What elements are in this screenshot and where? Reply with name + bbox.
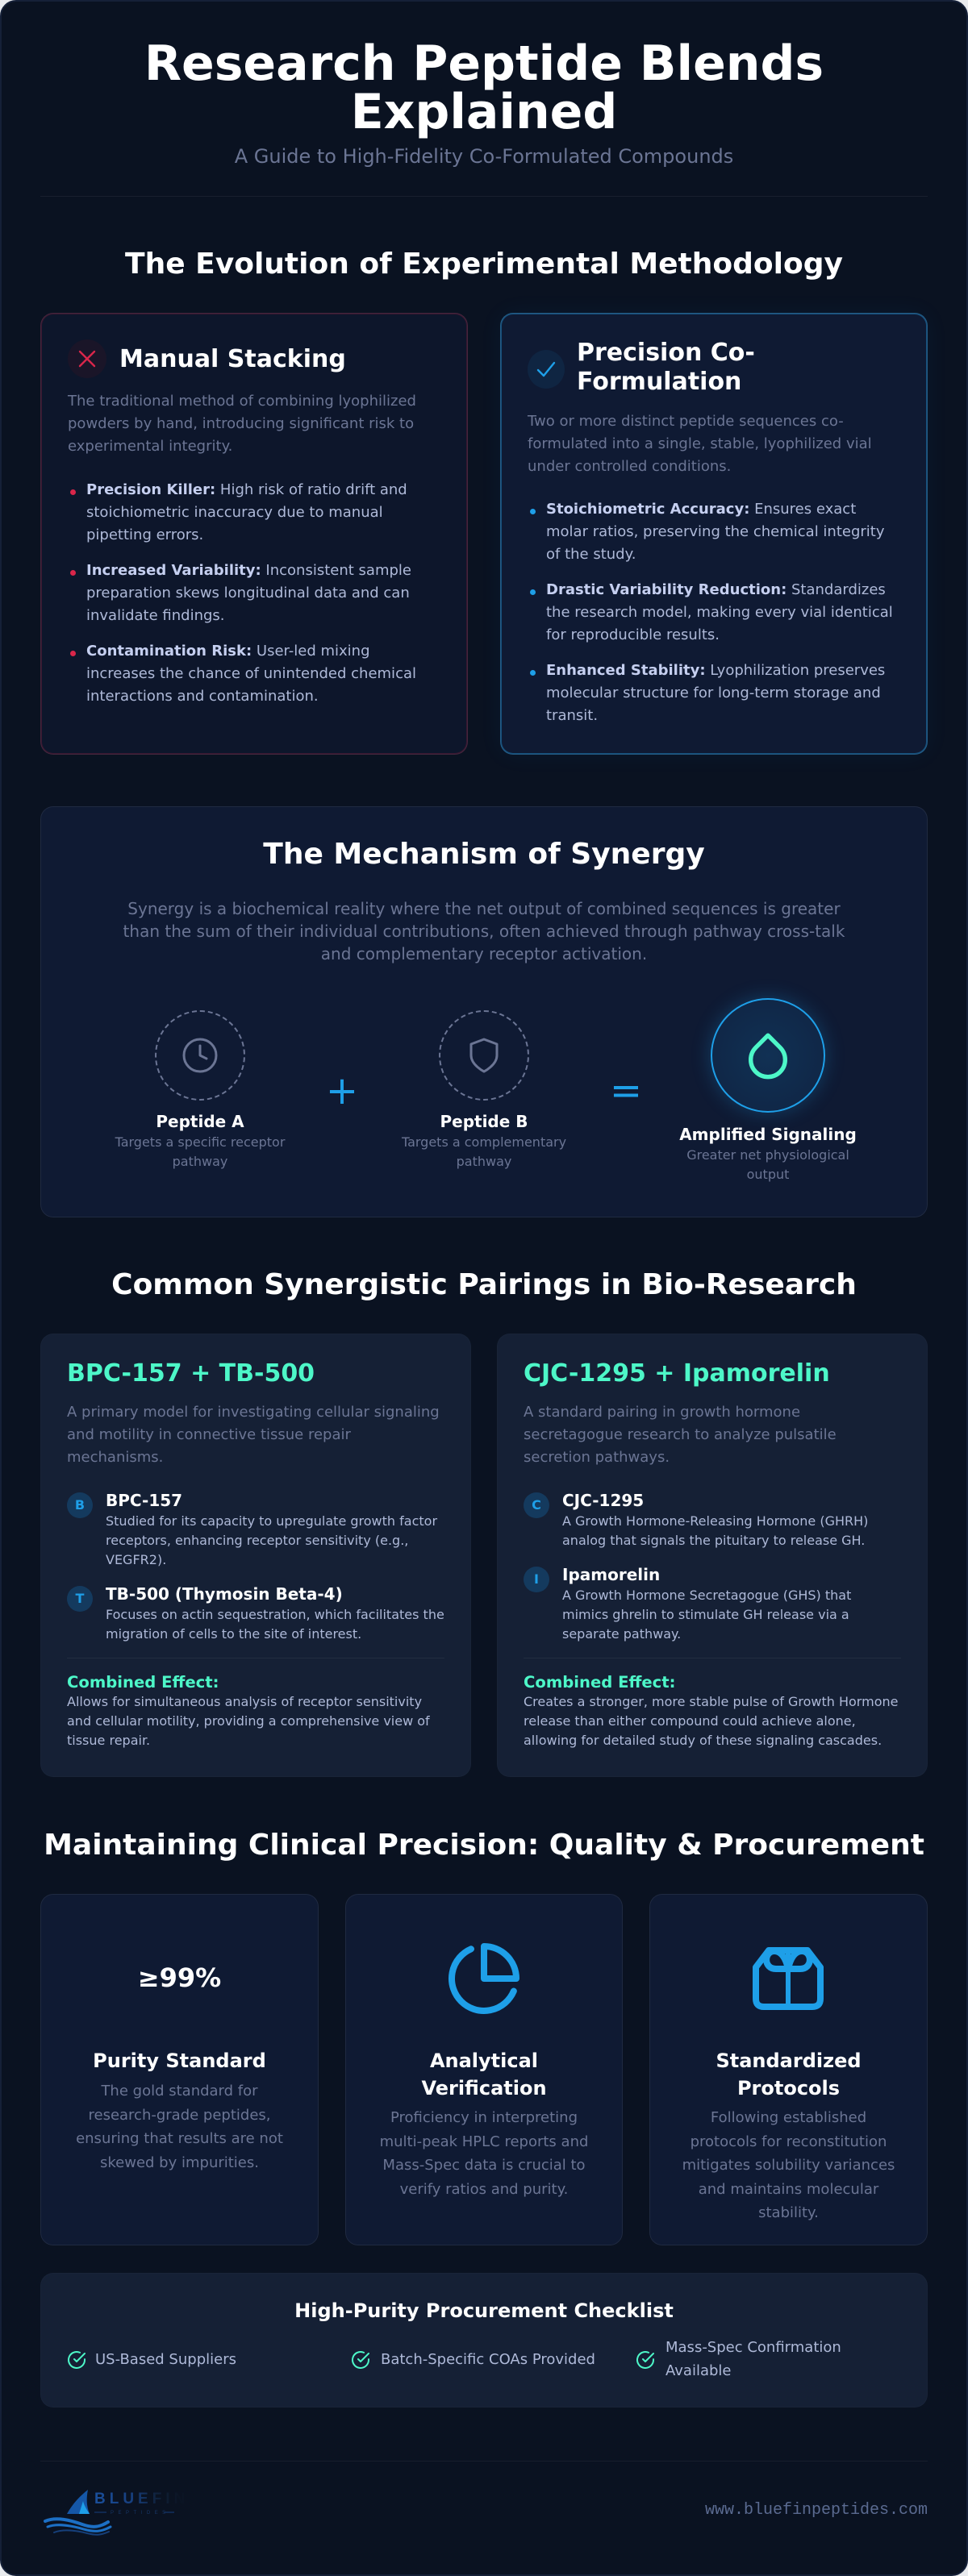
text: protocols description: mitigates solubility variances [682,2157,895,2174]
text: protocols description: stability. [758,2204,819,2221]
text: TB-500 description: Focuses on actin sequestration, which facilitates the [106,1607,444,1622]
bullet: drastic variability reduction: for reproducible results. [546,626,720,643]
heading: clinical precision: Maintaining Clinical Precision: Quality & Procurement [44,1829,924,1862]
bullet: increased variability: preparation skews longitudinal data and can [86,585,410,601]
icon: blue check [528,350,565,389]
logo: bluefin peptides: PEPTIDES [111,2511,170,2516]
text: pairing description: A primary model for investigating cellular signaling [67,1404,440,1421]
bullet: enhanced stability: Enhanced Stability: Lyophilization preserves [546,662,885,679]
badge: T [67,1586,93,1612]
text: pairing description: mechanisms. [67,1449,163,1466]
text: pairing description: and motility in connective tissue repair [67,1426,351,1443]
icon: check 3 [636,2351,654,2369]
text: combined effect description: release than either compound could achieve alone, [524,1713,856,1729]
text: co-formulation description: Two or more distinct peptide sequences co- [528,413,844,430]
bullet: drastic variability reduction: Drastic Variability Reduction: Standardizes [546,581,886,598]
text: amplified description: output [747,1167,789,1182]
text: peptide B description: Targets a complementary [402,1134,566,1150]
text: pairing description: A standard pairing in growth hormone [524,1404,800,1421]
checklist item: mass-spec confirmation: Mass-Spec Confirmation [666,2339,841,2356]
text: pairing description: secretagogue research to analyze pulsatile [524,1426,837,1443]
icon: peptide A clock [155,1010,245,1101]
text: amplified description: Greater net physiological [686,1147,849,1163]
bullet marker [70,570,76,576]
text: Ipamorelin description: separate pathway. [562,1626,681,1642]
bullet marker [530,509,536,514]
text: BPC-157 description: Studied for its capacity to upregulate growth factor [106,1513,437,1529]
heading: procurement checklist: High-Purity Procurement Checklist [294,2299,674,2322]
heading: standardized protocols: Standardized [716,2050,862,2072]
icon: amplified droplet [711,998,825,1113]
text: TB-500 description: migration of cells to the site of interest. [106,1626,361,1642]
icon: check 2 [352,2351,369,2369]
text: purity description: The gold standard for [101,2083,258,2100]
text: pairing description [524,1404,837,1466]
text: co-formulation description: under controlled conditions. [528,458,731,475]
bullet: drastic variability reduction: the research model, making every vial identical [546,604,893,621]
heading: analytical verification: Analytical [430,2050,538,2072]
bullet: drastic variability reduction [546,581,893,643]
text: CJC-1295 description [562,1513,868,1548]
heading: analytical verification [421,2050,547,2100]
text: pairing description: secretion pathways. [524,1449,670,1466]
text: verification description: Mass-Spec data is crucial to [382,2157,586,2174]
text: BPC-157 description: VEGFR2). [106,1552,166,1567]
bullet marker [70,651,76,656]
heading: CJC-1295 + Ipamorelin: CJC-1295 + Ipamorelin [524,1359,830,1388]
icon: peptide B shield [439,1010,529,1101]
panel: mechanism of synergy [40,806,928,1217]
bullet: precision killer [86,481,407,543]
symbol: equals: = [610,1068,642,1113]
title: Explained [351,84,617,140]
text: synergy description [123,899,845,963]
text: manual stacking description [68,393,416,455]
badge: T: T [76,1591,84,1606]
text: purity description: skewed by impurities. [100,2154,259,2170]
badge: I: I [534,1571,539,1587]
badge: I [524,1567,549,1592]
heading: standardized protocols: Protocols [737,2077,840,2100]
panel: precision co-formulation [500,313,928,755]
heading: manual stacking: Manual Stacking [119,345,346,373]
checklist item: US-based suppliers: US-Based Suppliers [95,2351,236,2368]
icon: check 1 [68,2351,86,2369]
name: TB-500: TB-500 (Thymosin Beta-4) [106,1584,343,1604]
panel: manual stacking [40,313,468,755]
text: TB-500 description [106,1607,444,1642]
heading: common pairings: Common Synergistic Pairings in Bio-Research [111,1268,857,1301]
text: co-formulation description: formulated into a single, stable, lyophilized vial [528,435,872,452]
panel: standardized protocols [649,1894,928,2245]
panel: procurement checklist [40,2273,928,2407]
text: peptide B description [402,1134,566,1169]
text: combined effect description [67,1694,430,1748]
text: verification description [380,2109,588,2198]
heading: precision co-formulation [577,339,755,396]
text: peptide A description: pathway [173,1154,227,1169]
title [144,35,824,140]
checklist item: mass-spec confirmation: Available [666,2362,731,2379]
bullet: stoichiometric accuracy: Stoichiometric Accuracy: Ensures exact [546,501,856,518]
badge: B: B [75,1497,85,1513]
text: combined effect description: Allows for simultaneous analysis of receptor sensitivity [67,1694,422,1709]
bullet: contamination risk: Contamination Risk: User-led mixing [86,643,370,660]
heading: precision co-formulation: Precision Co- [577,339,755,367]
text: CJC-1295 description: analog that signals the pituitary to release GH. [562,1533,865,1548]
badge: C [524,1492,549,1518]
subtitle: A Guide to High-Fidelity Co-Formulated Compounds [235,145,733,168]
heading: analytical verification: Verification [421,2077,547,2100]
bullet marker [70,489,76,495]
bullet: stoichiometric accuracy: of the study. [546,546,636,563]
bullet: contamination risk: interactions and contamination. [86,688,319,705]
heading: mechanism of synergy: The Mechanism of Synergy [263,838,705,871]
text: verification description: verify ratios and purity. [400,2180,568,2198]
label: peptide A: Peptide A [156,1112,244,1131]
label: peptide B: Peptide B [440,1112,528,1131]
text: peptide A description: Targets a specific receptor [115,1134,285,1150]
text: combined effect description: Creates a stronger, more stable pulse of Growth Hormone [524,1694,898,1709]
symbol: plus: + [326,1068,358,1113]
badge: C: C [532,1497,541,1513]
text: combined effect description: allowing for detailed study of these signaling cascades. [524,1733,882,1748]
icon: gift box [753,1947,824,2010]
text: CJC-1295 description: A Growth Hormone-Releasing Hormone (GHRH) [562,1513,868,1529]
title: Research Peptide Blends [144,35,824,92]
text: combined effect description [524,1694,898,1748]
badge: B [67,1492,93,1518]
bullet: increased variability: invalidate findings. [86,607,225,624]
text: purity description: research-grade peptides, [88,2106,271,2124]
heading: evolution of methodology: The Evolution of Experimental Methodology [125,248,843,281]
text: purity description [76,2083,283,2170]
text: peptide B description: pathway [457,1154,511,1169]
text: combined effect description: and cellular motility, providing a comprehensive view of [67,1713,430,1729]
bullet: precision killer: Precision Killer: High risk of ratio drift and [86,481,407,498]
label: amplified signaling: Amplified Signaling [679,1125,857,1144]
bullet: stoichiometric accuracy: molar ratios, preserving the chemical integrity [546,523,884,540]
text: protocols description: protocols for reconstitution [691,2133,887,2149]
text: manual stacking description: The traditional method of combining lyophilized [68,393,416,410]
text: purity description: ensuring that results are not [76,2130,283,2147]
stat: purity 99 percent: ≥99% [138,1962,221,1993]
text: amplified description [686,1147,849,1182]
website url: www.bluefinpeptides.com [705,2501,928,2520]
label: combined effect: Combined Effect: [524,1673,675,1692]
name: CJC-1295: CJC-1295 [562,1491,644,1510]
panel: CJC-1295 + Ipamorelin [497,1334,928,1777]
bullet: enhanced stability: transit. [546,707,598,724]
text: synergy description: Synergy is a biochemical reality where the net output of combined sequences is greater [127,899,841,918]
bullet: contamination risk [86,643,416,705]
heading: standardized protocols [716,2050,862,2100]
name: Ipamorelin: Ipamorelin [562,1565,660,1584]
text: pairing description [67,1404,440,1466]
panel: purity standard [40,1894,319,2245]
text: synergy description: than the sum of their individual contributions, often achieved through pathway cross-talk [123,922,845,941]
bullet: stoichiometric accuracy [546,501,884,563]
text: synergy description: and complementary receptor activation. [321,944,647,963]
checklist item: mass-spec confirmation [666,2339,841,2379]
text: protocols description [682,2109,895,2221]
text: verification description: Proficiency in interpreting [390,2109,578,2126]
text: manual stacking description: experimental integrity. [68,438,232,455]
heading: purity standard: Purity Standard [93,2050,266,2072]
bullet: enhanced stability [546,662,885,724]
text: combined effect description: tissue repair. [67,1733,150,1748]
text: manual stacking description: powders by hand, introducing significant risk to [68,415,414,432]
panel: analytical verification [345,1894,623,2245]
text: BPC-157 description [106,1513,437,1567]
text: verification description: multi-peak HPLC reports and [380,2133,588,2149]
heading: BPC-157 + TB-500: BPC-157 + TB-500 [67,1359,315,1388]
logo: bluefin peptides: BLUEFIN [94,2491,189,2507]
bullet: precision killer: pipetting errors. [86,526,203,543]
text: co-formulation description [528,413,872,475]
bullet: contamination risk: increases the chance of unintended chemical [86,665,416,682]
bullet: increased variability [86,562,411,624]
bullet marker [530,589,536,595]
checklist item: batch-specific COAs: Batch-Specific COAs Provided [381,2351,595,2368]
text: BPC-157 description: receptors, enhancing receptor sensitivity (e.g., [106,1533,408,1548]
text: peptide A description [115,1134,286,1169]
text: Ipamorelin description [562,1588,851,1642]
logo: bluefin peptides [44,2490,189,2536]
name: BPC-157: BPC-157 [106,1491,182,1510]
text: protocols description: Following established [711,2109,866,2126]
bullet: enhanced stability: molecular structure for long-term storage and [546,685,881,701]
label: combined effect: Combined Effect: [67,1673,219,1692]
bullet marker [530,670,536,676]
text: Ipamorelin description: A Growth Hormone Secretagogue (GHS) that [562,1588,851,1603]
bullet: precision killer: stoichiometric inaccuracy due to manual [86,504,383,521]
panel: BPC-157 + TB-500 [40,1334,471,1777]
icon: pie chart [449,1943,519,2014]
text: Ipamorelin description: mimics ghrelin to stimulate GH release via a [562,1607,849,1622]
text: protocols description: and maintains molecular [699,2180,878,2198]
heading: precision co-formulation: Formulation [577,368,741,396]
icon: red x [68,339,106,378]
bullet: increased variability: Increased Variability: Inconsistent sample [86,562,411,579]
